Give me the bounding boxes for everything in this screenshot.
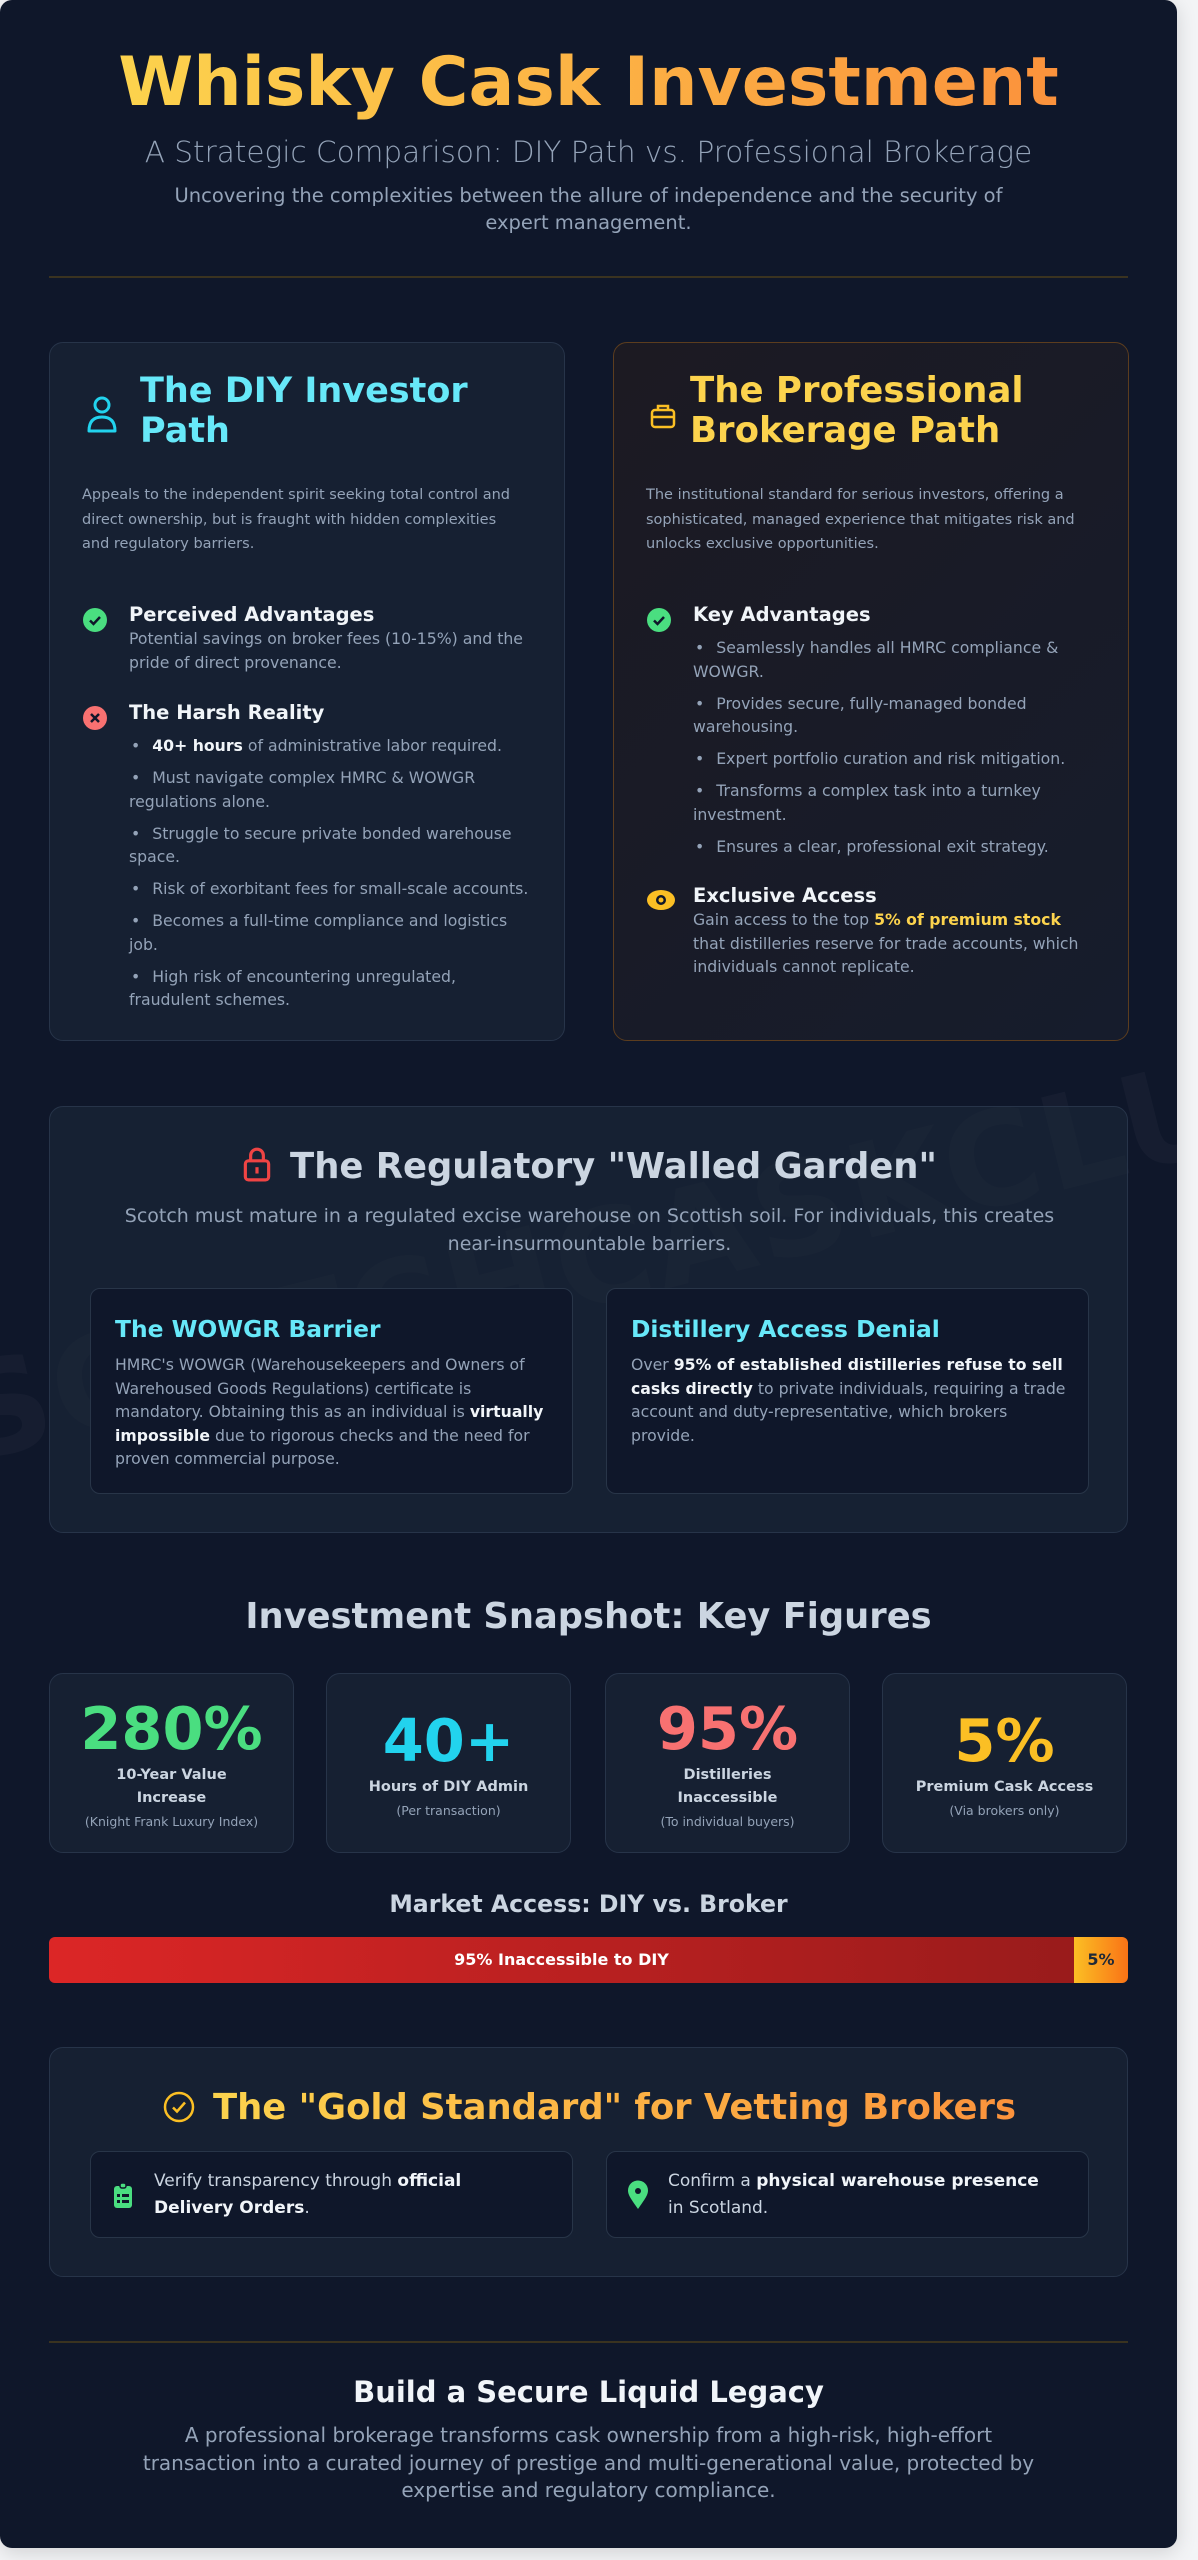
text: closing: A professional brokerage transforms cask ownership from a high-risk, high-effort transaction into a curated journey of prestige and multi-generational value, protected by expertise and regulatory compliance. — [143, 2423, 1034, 2502]
panel: gold standard — [49, 2047, 1128, 2277]
item: harsh reality: Risk of exorbitant fees for small-scale accounts. — [152, 879, 528, 898]
icon: user — [88, 396, 116, 432]
item: perceived advantages: Potential savings on broker fees (10-15%) and the pride of direct provenance. — [129, 629, 523, 672]
heading: DIY — [140, 371, 468, 451]
item: harsh reality: Must navigate complex HMRC & WOWGR regulations alone. — [129, 768, 475, 810]
item: key advantages: Key Advantages — [693, 603, 871, 626]
item: exclusive access: Exclusive Access — [693, 884, 877, 907]
stat: 5%: (Via brokers only) — [949, 1803, 1060, 1818]
item: harsh reality: High risk of encountering unregulated, fraudulent schemes. — [129, 966, 456, 1009]
stat: 40+: (Per transaction) — [396, 1803, 501, 1818]
box: distillery access denial: Over 95% of established distilleries refuse to sell casks directly to private individuals, requiring a trade account and duty-representative, which brokers provide. — [631, 1355, 1065, 1444]
subtitle: A Strategic Comparison: DIY Path vs. Professional Brokerage — [145, 135, 1032, 169]
intro text: Uncovering the complexities between the allure of independence and the security of expert management. — [174, 184, 1002, 234]
heading: professional — [690, 370, 1024, 451]
panel: professional path — [613, 342, 1129, 1041]
item: exclusive access: Gain access to the top 5% of premium stock that distilleries reserve for trade accounts, which individuals cannot replicate. — [693, 910, 1078, 976]
box: delivery orders: Verify transparency through official Delivery Orders. — [154, 2171, 461, 2218]
stat: 95%: (To individual buyers) — [660, 1814, 795, 1829]
text: walled garden intro: Scotch must mature in a regulated excise warehouse on Scottish soil. For individuals, this creates near-insurmountable barriers. — [125, 1205, 1054, 1255]
box: WOWGR barrier: HMRC's WOWGR (Warehousekeepers and Owners of Warehoused Goods Regulations) certificate is mandatory. Obtaining this as an individual is virtually impossible due to rigorous checks and the need for proven commercial purpose. — [115, 1355, 543, 1468]
item: harsh reality: Struggle to secure private bonded warehouse space. — [129, 824, 512, 866]
panel: DIY path — [49, 342, 565, 1041]
item: harsh reality — [83, 701, 528, 1009]
stat: 95%: Inaccessible — [678, 1790, 777, 1806]
box: delivery orders — [90, 2151, 573, 2238]
title: Whisky Cask Investment — [118, 43, 1059, 122]
text: pro description: The institutional standard for serious investors, offering a sophisticated, managed experience that mitigates risk and unlocks exclusive opportunities. — [646, 487, 1075, 552]
box: distillery access denial — [606, 1288, 1089, 1494]
item: key advantages: Transforms a complex task into a turnkey investment. — [693, 781, 1041, 824]
heading: walled garden: The Regulatory "Walled Garden" — [290, 1146, 937, 1187]
item: exclusive access — [647, 884, 1078, 976]
item: harsh reality: The Harsh Reality — [129, 701, 324, 724]
stat: 5%: Premium Cask Access — [916, 1779, 1093, 1795]
item: key advantages: Seamlessly handles all HMRC compliance & WOWGR. — [693, 638, 1058, 680]
stat: 95%: 95% — [657, 1694, 798, 1763]
stat: 280%: 10-Year Value — [116, 1767, 227, 1783]
text: DIY description: Appeals to the independent spirit seeking total control and direct ownership, but is fraught with hidden complexities and regulatory barriers. — [82, 487, 510, 552]
box: warehouse presence: Confirm a physical warehouse presence in Scotland. — [668, 2171, 1039, 2218]
icon: briefcase — [650, 404, 676, 428]
box: WOWGR barrier — [90, 1288, 573, 1494]
item: key advantages: Ensures a clear, professional exit strategy. — [716, 836, 1049, 856]
item: perceived advantages: Perceived Advantages — [129, 603, 374, 626]
stat: 280%: (Knight Frank Luxury Index) — [85, 1814, 258, 1829]
stat: 95%: Distilleries — [684, 1767, 771, 1783]
box: WOWGR barrier: The WOWGR Barrier — [115, 1315, 381, 1343]
stat: 40+: 40+ — [383, 1706, 514, 1775]
item: harsh reality: 40+ hours of administrative labor required. — [152, 736, 502, 755]
icon: check circle — [164, 2092, 194, 2122]
item: key advantages: Expert portfolio curation and risk mitigation. — [716, 749, 1065, 768]
stat: 280%: 280% — [80, 1694, 263, 1763]
heading: professional: The Professional — [690, 370, 1024, 411]
heading: DIY: Path — [140, 411, 230, 451]
stat: 280%: Increase — [137, 1790, 206, 1806]
item: perceived advantages — [83, 603, 523, 672]
icon: lock — [244, 1148, 270, 1182]
item: key advantages: Provides secure, fully-managed bonded warehousing. — [693, 694, 1027, 736]
stat: 40+: Hours of DIY Admin — [369, 1779, 528, 1795]
bar chart: market access: 95% Inaccessible to DIY — [454, 1950, 669, 1969]
heading: gold standard: The "Gold Standard" for Vetting Brokers — [213, 2087, 1016, 2128]
stat: 5% — [882, 1673, 1127, 1853]
heading: market access: Market Access: DIY vs. Broker — [389, 1890, 788, 1918]
heading: build legacy: Build a Secure Liquid Legacy — [353, 2375, 824, 2409]
box: distillery access denial: Distillery Access Denial — [631, 1315, 940, 1343]
item: key advantages — [647, 603, 1065, 856]
stat: 280% — [49, 1673, 294, 1853]
heading: professional: Brokerage Path — [690, 410, 1000, 451]
panel: walled garden — [49, 1106, 1128, 1533]
box: warehouse presence — [606, 2151, 1089, 2238]
heading: DIY: The DIY Investor — [140, 371, 468, 411]
stat: 95% — [605, 1673, 850, 1853]
heading: investment snapshot: Investment Snapshot: Key Figures — [245, 1596, 932, 1637]
item: harsh reality: Becomes a full-time compliance and logistics job. — [129, 911, 507, 954]
stat: 5%: 5% — [954, 1706, 1055, 1775]
stat: 40+ — [326, 1673, 571, 1853]
bar chart: market access — [49, 1937, 1128, 1983]
bar chart: market access: 5% — [1087, 1950, 1115, 1969]
